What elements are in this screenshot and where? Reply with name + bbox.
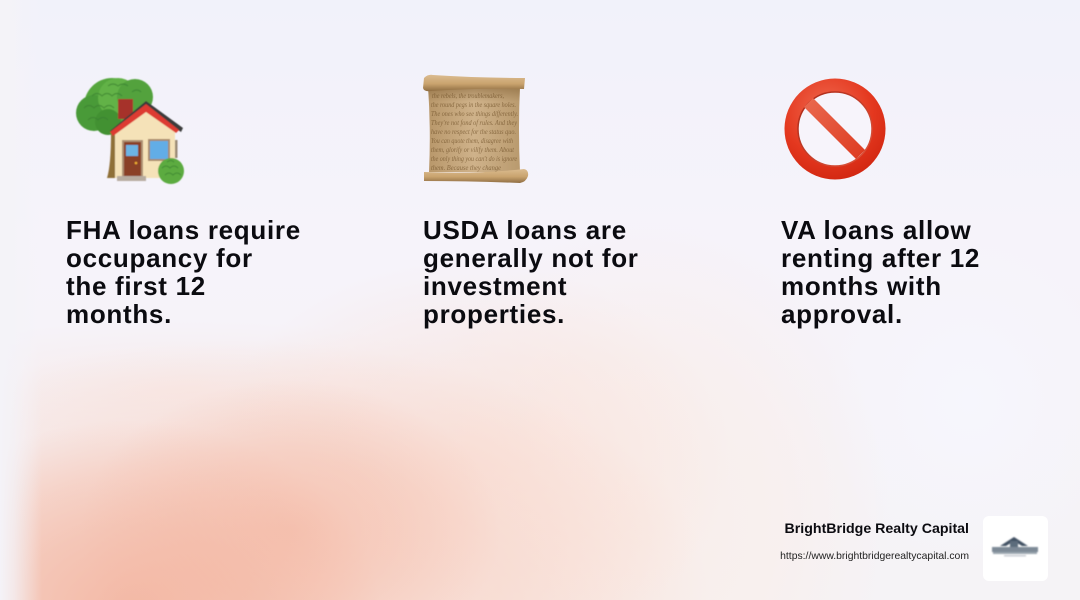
caption: VA — [781, 215, 980, 329]
caption: FHA: the first 12 — [66, 271, 206, 301]
caption: USDA — [423, 215, 639, 329]
caption: FHA — [66, 215, 301, 329]
brand name: BrightBridge Realty Capital — [785, 521, 969, 537]
caption: FHA: occupancy for — [66, 243, 253, 273]
icon: parchment scroll: them. Because they change — [431, 163, 502, 172]
caption: USDA: generally not for — [423, 243, 639, 273]
caption: FHA: FHA loans require — [66, 215, 301, 245]
icon: parchment scroll: them, glorify or vilify them. About — [431, 145, 515, 154]
logo card — [983, 516, 1048, 581]
icon: parchment scroll: the rebels, the troublemakers, — [432, 91, 504, 100]
caption: VA: months with — [781, 271, 942, 301]
caption: VA: renting after 12 — [781, 243, 980, 273]
icon: prohibited sign — [784, 78, 886, 180]
website url: https://www.brightbridgerealtycapital.com — [780, 551, 969, 562]
icon: logo roof — [991, 536, 1039, 557]
caption: VA: approval. — [781, 299, 903, 329]
icon: parchment scroll — [423, 74, 528, 183]
caption: VA: VA loans allow — [781, 215, 971, 245]
icon: parchment scroll: You can quote them, disagree with — [431, 136, 513, 145]
caption: USDA: properties. — [423, 299, 565, 329]
icon: parchment scroll: have no respect for the status quo. — [431, 127, 516, 136]
icon: house with tree — [75, 77, 185, 185]
caption: FHA: months. — [66, 299, 172, 329]
caption: USDA: investment — [423, 271, 567, 301]
icon: parchment scroll: They're not fond of rules. And they — [431, 118, 518, 127]
caption: USDA: USDA loans are — [423, 215, 627, 245]
icon: parchment scroll: the round pegs in the square holes. — [431, 100, 516, 109]
